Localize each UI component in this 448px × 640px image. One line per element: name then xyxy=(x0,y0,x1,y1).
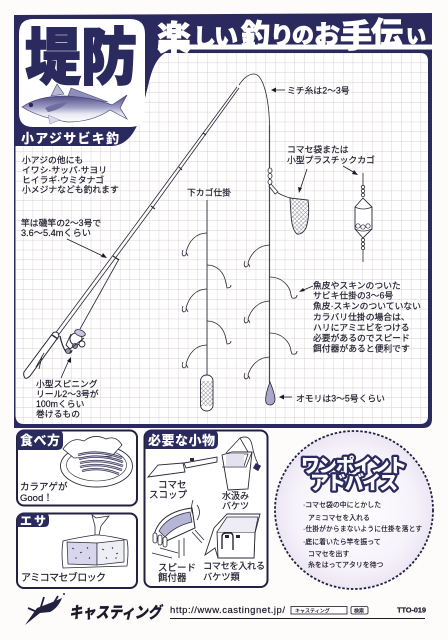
heading: ワンポイントアドバイス xyxy=(301,454,407,494)
heading: 楽しい釣りのお手伝い: り xyxy=(270,23,294,50)
label: komase bag or cage xyxy=(287,144,375,193)
icon: fried fish on plate xyxy=(60,436,132,487)
text: advice list: ·底に着いたら竿を振って xyxy=(303,537,381,546)
label: sabiki rig notes: 魚皮·スキンのついていない xyxy=(313,300,421,311)
label: コマセを入れるバケツ類: コマセを入れる xyxy=(203,561,265,571)
text: other fish species xyxy=(22,154,119,194)
text: カラアゲが Good! xyxy=(20,481,68,504)
label: 下カゴ仕掛: 下カゴ仕掛 xyxy=(187,186,231,198)
illustration: fishing rod xyxy=(24,87,239,378)
tab: エサ: エサ xyxy=(20,514,46,528)
label: sabiki rig notes: サビキ仕掛の3〜6号 xyxy=(313,290,393,300)
heading: 楽しい釣りのお手伝い: 釣 xyxy=(241,19,270,52)
icon: sinker xyxy=(266,382,275,405)
label: 水汲みバケツ: 水汲み xyxy=(222,490,249,501)
text: advice list: アミコマセを入れる xyxy=(308,514,370,522)
label: コマセスコップ: コマセ xyxy=(158,480,187,491)
label: コマセを入れるバケツ類 xyxy=(203,561,265,582)
icon: spinning reel xyxy=(60,328,86,354)
text: advice list: ·コマセ袋の中にとかした xyxy=(303,500,381,509)
search box: キャスティング xyxy=(295,608,330,614)
heading: 堤防: 堤防 xyxy=(25,24,137,93)
label: reel spec xyxy=(36,357,99,419)
icon: horse mackerel fish xyxy=(22,84,127,124)
footer: url and search box: http://www.castingnet.jp/ xyxy=(170,605,285,616)
label: スピード餌付器: スピード xyxy=(158,563,196,574)
label: sabiki rig notes: 魚皮やスキンのついた xyxy=(313,280,401,290)
panel: title badge xyxy=(19,19,145,127)
label: コマセを入れるバケツ類: バケツ類 xyxy=(203,571,240,582)
label: reel spec: リール2〜3号が xyxy=(36,388,99,399)
icon: plastic cage xyxy=(355,173,372,262)
heading: 楽しい釣りのお手伝い: の xyxy=(292,23,314,48)
text: other fish species: 小メジナなども釣れます xyxy=(22,184,119,194)
label: sabiki rig notes: 餌付器があると便利です xyxy=(313,342,410,354)
label: 小アジサビキ釣: 小アジサビキ釣 xyxy=(21,131,119,146)
footer: code TTO-019: TTO-019 xyxy=(397,606,426,614)
panel: 食べ方 xyxy=(17,430,137,506)
heading: 楽しい釣りのお手伝い xyxy=(157,16,426,58)
illustration: main sabiki rig xyxy=(239,74,297,405)
label: スピード餌付器: 餌付器 xyxy=(158,573,187,584)
label: line spec: ミチ糸は2〜3号 xyxy=(287,84,350,96)
label: rod spec: 3.6〜5.4mくらい xyxy=(21,228,91,238)
tab: 食べ方: 食べ方 xyxy=(20,433,60,448)
text: advice list: ·仕掛がからまないように仕掛を落とす xyxy=(303,524,422,533)
icon: water bucket xyxy=(222,437,261,490)
panel: エサ xyxy=(17,513,137,588)
label: 水汲みバケツ: バケツ xyxy=(222,501,249,511)
tab: 必要な小物: 必要な小物 xyxy=(148,433,215,448)
logo: casting fish mark xyxy=(25,593,65,625)
heading: 楽しい釣りのお手伝い: お xyxy=(314,20,340,50)
heading: 楽しい釣りのお手伝い: 楽 xyxy=(157,20,191,58)
text: カラアゲが Good!: Good！ xyxy=(20,493,53,504)
heading: 楽しい釣りのお手伝い: し xyxy=(193,24,216,50)
label: コマセスコップ: スコップ xyxy=(149,490,188,501)
text: アミコマセブロック: アミコマセブロック xyxy=(21,571,106,584)
footer: url and search box xyxy=(170,605,425,618)
panel: 必要な小物 xyxy=(144,430,268,587)
search button: 検索 xyxy=(354,608,364,614)
label: rod spec: 竿は磯竿の2〜3号で xyxy=(21,217,101,228)
label: 水汲みバケツ xyxy=(222,490,249,511)
label: スピード餌付器 xyxy=(158,563,196,584)
text: other fish species: 小アジの他にも xyxy=(22,154,83,165)
logo: キャスティング wordmark: キャスティング xyxy=(69,603,163,622)
heading: ワンポイントアドバイス: アドバイス xyxy=(310,472,398,494)
label: sabiki rig notes: ハリにアミエビをつける xyxy=(313,322,410,332)
heading: 楽しい釣りのお手伝い: い xyxy=(214,24,238,51)
icon: frozen komase block xyxy=(62,515,128,568)
label: sabiki rig notes: カラバリ仕掛の場合は、 xyxy=(313,311,410,322)
icon: komase scoop xyxy=(148,457,217,477)
label: reel spec: 100mくらい xyxy=(36,399,85,409)
label: sinker spec: オモリは3〜5号くらい xyxy=(296,394,385,404)
text: other fish species: ヒイラギ·ウミタナゴ xyxy=(22,174,104,185)
label: コマセスコップ xyxy=(149,480,188,501)
icon: komase bag on swivel xyxy=(268,168,309,234)
label: reel spec: 巻けるもの xyxy=(36,408,80,419)
text: advice list: コマセを出す xyxy=(308,549,349,558)
search box xyxy=(291,606,347,614)
heading: 楽しい釣りのお手伝い: 手 xyxy=(340,18,372,54)
panel: one-point advice circle xyxy=(275,431,433,589)
panel: main frame xyxy=(14,13,432,428)
icon: lower feeder cage xyxy=(200,375,213,411)
heading: 楽しい釣りのお手伝い: 伝 xyxy=(371,16,403,52)
label: komase bag or cage: コマセ袋または xyxy=(287,144,349,154)
label: sabiki rig notes xyxy=(299,280,421,354)
illustration: lower-cage sabiki rig xyxy=(182,200,231,411)
text: advice list: 糸をはってアタリを待つ xyxy=(308,560,384,569)
text: advice list xyxy=(303,500,422,569)
heading: ワンポイントアドバイス: ワンポイント xyxy=(301,454,407,477)
text: other fish species: イワシ·サッパ·サヨリ xyxy=(22,165,107,175)
label: sabiki rig notes: 必要があるのでスピード xyxy=(313,332,410,343)
text: カラアゲが Good!: カラアゲが xyxy=(20,481,68,493)
label: rod spec xyxy=(21,217,107,258)
search button xyxy=(351,606,368,614)
icon: komase bucket xyxy=(205,514,260,558)
icon: speed feeder xyxy=(152,500,204,558)
label: komase bag or cage: 小型プラスチックカゴ xyxy=(287,154,375,165)
label: reel spec: 小型スピニング xyxy=(36,378,98,389)
heading: 楽しい釣りのお手伝い: い xyxy=(406,26,426,48)
